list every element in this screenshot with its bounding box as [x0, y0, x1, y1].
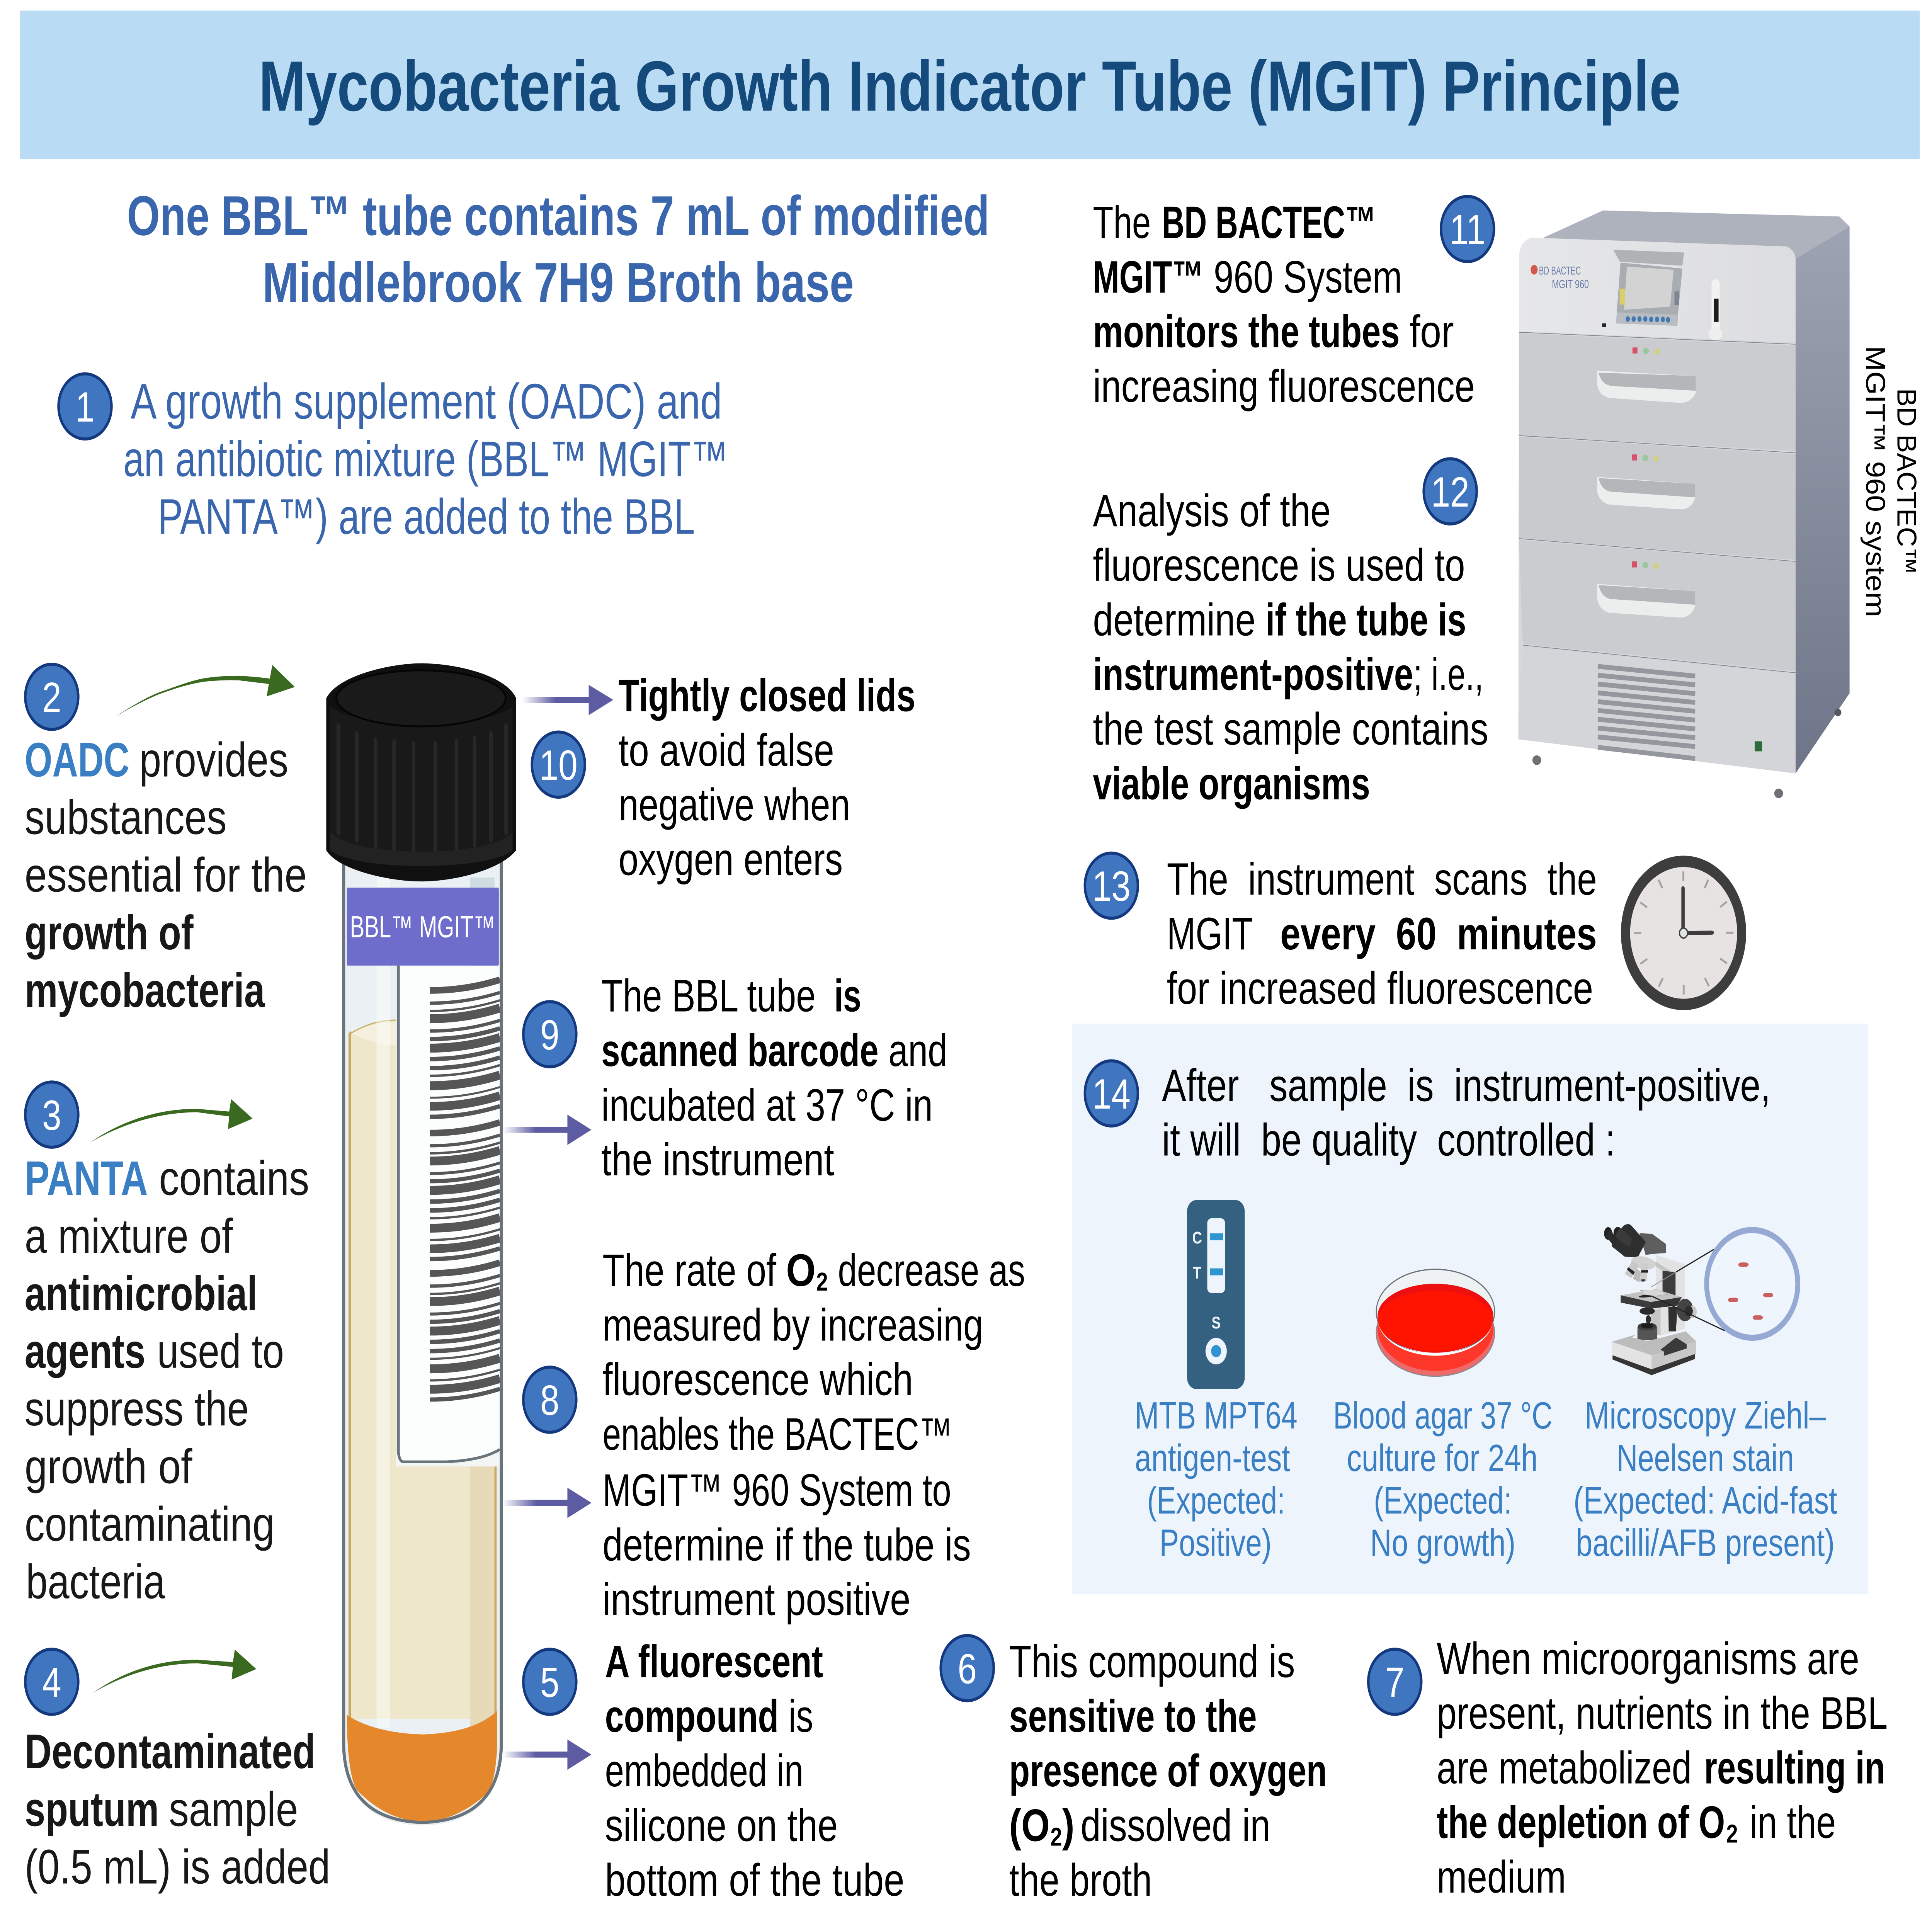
label: microscopy: Microscopy Ziehl– [1585, 1394, 1826, 1437]
step 3: PANTA: a mixture of [25, 1209, 233, 1263]
step 7: oxygen depletion: present, nutrients in the BBL [1437, 1688, 1888, 1738]
step 12: analysis: 12 [1431, 468, 1469, 516]
step 3: PANTA [25, 1082, 309, 1609]
step 10: closed lids [532, 670, 915, 885]
step 4: sputum: (0.5 mL) is added [25, 1840, 330, 1894]
panel: quality control [1072, 1024, 1868, 1594]
step 10: closed lids: 10 [539, 742, 578, 789]
step 3: PANTA: suppress the [25, 1382, 249, 1436]
subtitle heading [127, 185, 990, 314]
step 4: sputum: Decontaminated [25, 1725, 315, 1779]
step 8: O2 decrease [523, 1245, 1025, 1625]
step 7: oxygen depletion: When microorganisms are [1437, 1633, 1859, 1684]
subtitle heading: One BBL™ tube contains 7 mL of modified [127, 185, 990, 247]
step 12: analysis: the test sample contains [1093, 704, 1488, 754]
step 8: O2 decrease: O [786, 1245, 816, 1296]
step 11: monitoring: 960 System [1214, 252, 1402, 303]
step 5: fluorescent compound: A fluorescent [605, 1636, 823, 1687]
label: MPT64: antigen-test [1135, 1437, 1290, 1479]
step 6: oxygen sensitive: This compound is [1009, 1636, 1295, 1687]
drawer handles [1597, 371, 1696, 403]
step 7: oxygen depletion: resulting in [1704, 1742, 1885, 1793]
step 10: closed lids: Tightly closed lids [619, 670, 915, 721]
step 9: barcode scan: 9 [540, 1011, 560, 1059]
step 7: oxygen depletion [1368, 1633, 1888, 1902]
arrow: PANTA to tube [90, 1099, 253, 1143]
step 14: quality control text: 14 [1092, 1070, 1131, 1118]
step 3: PANTA: 3 [42, 1092, 61, 1139]
label: microscopy [1573, 1394, 1837, 1564]
step 12: analysis: fluorescence is used to [1093, 540, 1465, 590]
step 13: scan interval: MGIT [1167, 908, 1253, 959]
step 6: oxygen sensitive: (O [1009, 1800, 1050, 1851]
step 14: quality control text: it will be quality controlled : [1162, 1114, 1615, 1165]
step 14: quality control text [1085, 1060, 1770, 1165]
step 5: fluorescent compound: compound [605, 1690, 779, 1742]
step 4: sputum: sample [169, 1782, 298, 1837]
step 6: oxygen sensitive: 2 [1050, 1822, 1062, 1851]
control screen [1613, 250, 1684, 327]
step 12: analysis: ; i.e., [1413, 649, 1483, 700]
step 7: oxygen depletion: 2 [1726, 1819, 1738, 1848]
label: blood agar [1333, 1394, 1553, 1564]
step 12: analysis: instrument-positive [1093, 649, 1413, 700]
step 1: supplement text: PANTA™) are added to the BBL [158, 489, 695, 545]
icon: microscope with magnified field [1604, 1224, 1800, 1375]
step 12: analysis: Analysis of the [1093, 485, 1331, 536]
step 1: supplement text: A growth supplement (OADC) and [131, 374, 722, 430]
label: blood agar: Blood agar 37 °C [1333, 1394, 1553, 1437]
step 6: oxygen sensitive: ) [1062, 1800, 1075, 1851]
step 3: PANTA: growth of [25, 1439, 192, 1494]
step 12: analysis [1093, 459, 1488, 809]
step 13: scan interval [1085, 853, 1597, 1014]
step 13: scan interval: every 60 minutes [1280, 908, 1597, 959]
icon: MPT64 antigen test cassette: C [1192, 1229, 1202, 1247]
step 12: analysis: if the tube is [1265, 594, 1466, 645]
icon: clock [1621, 855, 1746, 1010]
step 3: PANTA: agents [25, 1324, 145, 1378]
step 10: closed lids: oxygen enters [619, 834, 843, 885]
label: MPT64: (Expected: [1147, 1479, 1285, 1522]
subtitle heading: Middlebrook 7H9 Broth base [262, 251, 854, 314]
step 12: analysis: viable organisms [1093, 758, 1370, 809]
step 2: OADC [25, 664, 307, 1017]
step 1: supplement text: 1 [75, 383, 95, 431]
step 8: O2 decrease: 8 [540, 1377, 560, 1424]
step 8: O2 decrease: fluorescence which [602, 1354, 913, 1405]
step 1: supplement text [58, 374, 728, 545]
step 11: monitoring: monitors the tubes [1093, 306, 1400, 357]
BD BACTEC MGIT 960 instrument: BD BACTEC [1539, 264, 1581, 277]
icon: MPT64 antigen test cassette [1187, 1200, 1245, 1389]
step 11: monitoring: 11 [1449, 206, 1485, 253]
step 9: barcode scan [523, 970, 947, 1185]
title banner [20, 10, 1920, 159]
arrow: step 8 [503, 1488, 592, 1518]
step 8: O2 decrease: determine if the tube is [602, 1519, 971, 1570]
step 7: oxygen depletion: medium [1437, 1851, 1566, 1902]
step 7: oxygen depletion: in the [1750, 1797, 1836, 1848]
step 7: oxygen depletion: 7 [1385, 1659, 1405, 1706]
step 13: scan interval: 13 [1092, 862, 1131, 910]
step 9: barcode scan: and [888, 1025, 947, 1076]
step 9: barcode scan: scanned barcode [601, 1025, 879, 1076]
step 9: barcode scan: the instrument [601, 1134, 834, 1185]
BD BACTEC MGIT 960 instrument: MGIT 960 [1552, 278, 1589, 291]
step 2: OADC: growth of [25, 906, 194, 960]
step 9: barcode scan: is [834, 970, 861, 1021]
label: microscopy: (Expected: Acid-fast [1573, 1479, 1837, 1522]
step 3: PANTA: contains [159, 1151, 309, 1206]
instrument caption (rotated): MGIT™ 960 system [1860, 346, 1891, 617]
step 3: PANTA: contaminating [25, 1497, 275, 1551]
step 4: sputum [25, 1649, 330, 1894]
step 11: monitoring [1093, 196, 1494, 412]
label: blood agar: No growth) [1370, 1522, 1515, 1564]
step 7: oxygen depletion: the depletion of O [1437, 1797, 1725, 1848]
step 1: supplement text: an antibiotic mixture (BBL™ MGIT™ [123, 431, 728, 487]
step 9: barcode scan: incubated at 37 °C in [601, 1080, 933, 1131]
step 8: O2 decrease: The rate of [602, 1245, 776, 1296]
barcode [430, 980, 500, 1400]
scanner [1711, 279, 1720, 338]
arrow: step 5 [503, 1740, 592, 1770]
icon: MPT64 antigen test cassette: S [1212, 1314, 1221, 1332]
step 2: OADC: provides [139, 733, 288, 787]
step 2: OADC: OADC [25, 733, 129, 787]
step 7: oxygen depletion: are metabolized [1437, 1742, 1692, 1793]
step 11: monitoring: increasing fluorescence [1093, 361, 1475, 412]
step 11: monitoring: MGIT™ [1093, 252, 1204, 303]
MGIT tube illustration: BBL™ MGIT™ [350, 910, 495, 944]
step 10: closed lids: negative when [619, 779, 850, 830]
step 6: oxygen sensitive: presence of oxygen [1009, 1745, 1327, 1796]
step 8: O2 decrease: MGIT™ 960 System to [602, 1465, 951, 1515]
step 2: OADC: substances [25, 791, 227, 845]
step 13: scan interval: for increased fluorescence [1167, 963, 1593, 1014]
label: MPT64: Positive) [1160, 1522, 1272, 1564]
arrow: sputum to tube [92, 1650, 256, 1693]
step 3: PANTA: PANTA [25, 1151, 148, 1206]
step 13: scan interval: The instrument scans the [1167, 854, 1597, 905]
drawer LEDs [1633, 347, 1638, 354]
icon: MPT64 antigen test cassette: T [1193, 1264, 1201, 1282]
instrument caption (rotated): BD BACTEC™ [1892, 388, 1922, 575]
step 2: OADC: mycobacteria [25, 963, 265, 1017]
step 12: analysis: determine [1093, 594, 1255, 645]
step 3: PANTA: bacteria [26, 1555, 165, 1609]
label: blood agar: (Expected: [1374, 1479, 1512, 1522]
BD BACTEC MGIT 960 instrument [1519, 211, 1850, 798]
step 5: fluorescent compound: embedded in [605, 1745, 803, 1796]
step 5: fluorescent compound [523, 1636, 905, 1905]
step 5: fluorescent compound: bottom of the tube [605, 1854, 905, 1905]
step 5: fluorescent compound: 5 [540, 1659, 560, 1706]
icon: blood agar petri dish [1376, 1269, 1495, 1376]
arrow: step 10 [522, 685, 613, 715]
arrow: OADC to tube [116, 665, 295, 716]
step 6: oxygen sensitive: dissolved in [1081, 1800, 1270, 1851]
step 8: O2 decrease: decrease as [838, 1245, 1025, 1296]
step 6: oxygen sensitive: 6 [957, 1645, 977, 1693]
step 2: OADC: essential for the [25, 848, 307, 902]
step 9: barcode scan: The BBL tube [601, 970, 816, 1021]
step 5: fluorescent compound: silicone on the [605, 1800, 838, 1851]
label: microscopy: Neelsen stain [1617, 1437, 1794, 1479]
label: blood agar: culture for 24h [1347, 1437, 1538, 1479]
title banner: Mycobacteria Growth Indicator Tube (MGIT) Principle [259, 46, 1680, 126]
step 4: sputum: 4 [42, 1659, 61, 1706]
step 11: monitoring: The [1093, 197, 1151, 248]
step 14: quality control text: After sample is instrument-positive, [1162, 1060, 1770, 1111]
step 6: oxygen sensitive: the broth [1009, 1854, 1152, 1905]
label: MPT64 [1135, 1394, 1298, 1564]
step 4: sputum: sputum [25, 1782, 159, 1837]
vent [1598, 667, 1695, 759]
MGIT tube illustration [326, 663, 516, 1826]
step 10: closed lids: to avoid false [619, 724, 834, 776]
step 8: O2 decrease: instrument positive [602, 1574, 911, 1625]
step 11: monitoring: BD BACTEC™ [1162, 197, 1376, 248]
step 3: PANTA: antimicrobial [25, 1267, 257, 1321]
step 5: fluorescent compound: is [789, 1690, 813, 1742]
step 3: PANTA: used to [157, 1324, 284, 1378]
step 8: O2 decrease: measured by increasing [602, 1299, 983, 1350]
step 8: O2 decrease: 2 [816, 1267, 828, 1296]
label: MPT64: MTB MPT64 [1135, 1394, 1298, 1437]
arrow: step 9 [503, 1115, 592, 1145]
step 6: oxygen sensitive: sensitive to the [1009, 1690, 1257, 1742]
instrument caption (rotated) [1860, 346, 1922, 617]
step 2: OADC: 2 [42, 674, 61, 721]
step 6: oxygen sensitive [941, 1636, 1327, 1905]
label: microscopy: bacilli/AFB present) [1576, 1522, 1835, 1564]
step 8: O2 decrease: enables the BACTEC™ [602, 1408, 952, 1459]
step 11: monitoring: for [1410, 306, 1454, 357]
